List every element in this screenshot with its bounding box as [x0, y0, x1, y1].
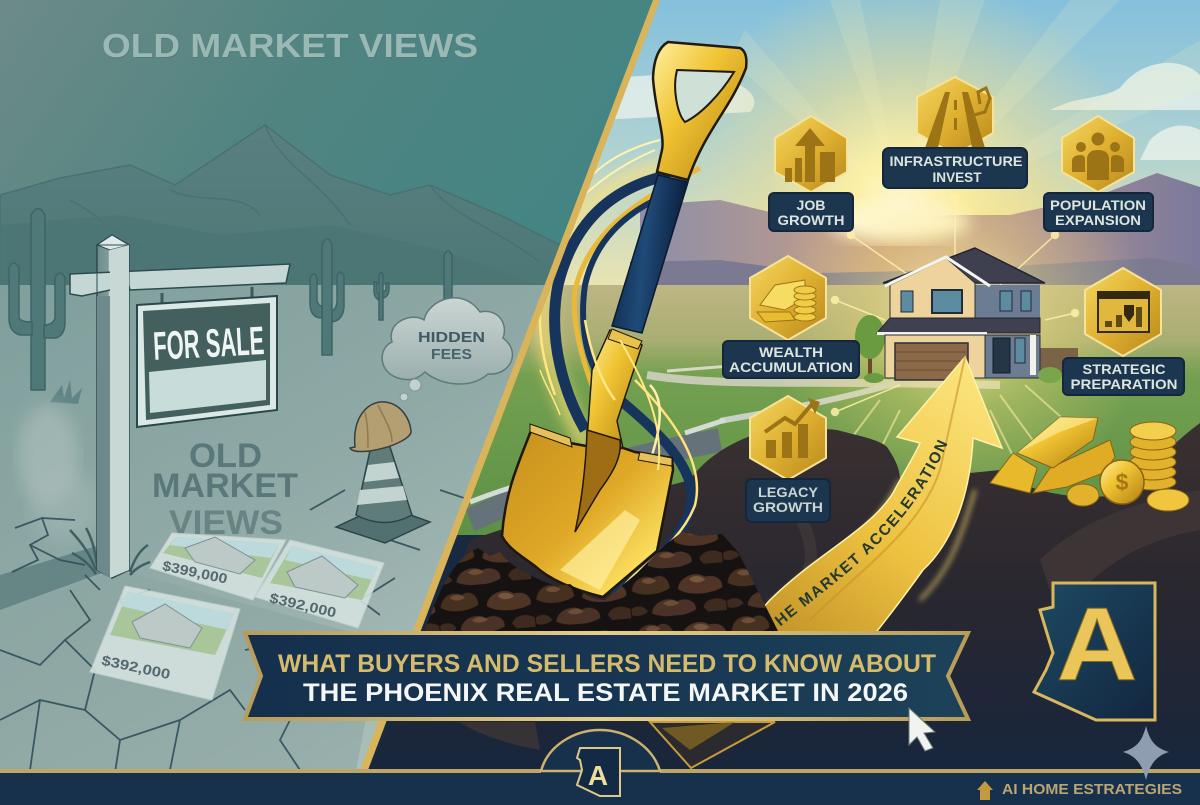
icon: golden shovel — [502, 42, 746, 597]
listing card 2: $392,000 — [268, 590, 338, 620]
listing card 1: $399,000 — [161, 557, 229, 587]
house glow — [800, 184, 1124, 478]
ribbons in front of shovel — [540, 140, 660, 470]
panel: new market right scene — [385, 0, 1200, 769]
soil mounds — [385, 423, 1200, 750]
headline line 1: WHAT BUYERS AND SELLERS NEED TO KNOW ABOUT — [278, 650, 936, 678]
icon: gold bars and coins pile: $ — [1116, 469, 1129, 495]
badge: legacy growth: LEGACY — [758, 484, 819, 500]
icon: mouse cursor — [909, 708, 935, 751]
badge: strategic preparation: STRATEGIC — [1082, 361, 1166, 377]
badge: strategic preparation: PREPARATION — [1070, 376, 1178, 392]
text: old market views on ground — [154, 443, 298, 534]
clouds — [600, 63, 1200, 160]
badge: infrastructure invest: INVEST — [932, 169, 982, 185]
sign board — [137, 296, 277, 427]
arrow: market acceleration — [648, 356, 1027, 769]
banner: headline ribbon — [245, 633, 968, 719]
badge: wealth accumulation — [723, 256, 859, 378]
callout: hidden fees thought cloud: HIDDEN — [418, 329, 485, 346]
desert scrub and dust — [0, 380, 380, 805]
badge: job growth — [769, 116, 853, 231]
sign board: FOR SALE — [152, 319, 265, 369]
badge: wealth accumulation: ACCUMULATION — [729, 359, 853, 375]
icon: gold bars and coins pile — [990, 417, 1189, 511]
ground — [400, 285, 1200, 535]
divider: gold diagonal — [360, 0, 660, 770]
text: old market views on ground: OLD — [189, 437, 262, 475]
text: old market views on ground: MARKET — [152, 467, 298, 505]
listing card 3: $392,000 — [100, 652, 172, 682]
footer small Arizona logo — [577, 748, 620, 796]
heading: old market views: OLD MARKET VIEWS — [102, 27, 478, 64]
ribbons behind shovel — [544, 150, 700, 590]
road — [470, 366, 1000, 520]
grass at base — [70, 528, 150, 575]
badge: job growth: GROWTH — [778, 212, 844, 228]
callout: hidden fees thought cloud: FEES — [431, 346, 472, 363]
badge: infrastructure invest: INFRASTRUCTURE — [890, 153, 1022, 169]
shovel neck and collar — [587, 330, 642, 448]
footer small Arizona logo: A — [588, 760, 608, 791]
headline line 2: THE PHOENIX REAL ESTATE MARKET IN 2026 — [303, 679, 908, 707]
footer bar — [0, 730, 1200, 805]
mountains: far and near ridge — [630, 173, 1200, 290]
hexagon badges — [723, 77, 1184, 522]
arrow: market acceleration: THE MARKET ACCELERATION — [772, 440, 948, 626]
heading: old market views — [104, 34, 478, 58]
badge: legacy growth: GROWTH — [753, 499, 823, 515]
badge: strategic preparation — [1063, 268, 1184, 395]
cactus: saguaro group — [9, 208, 452, 390]
footer brand: AI Home Estrategies: AI HOME ESTRATEGIES — [1002, 781, 1182, 798]
icon: sparkle star watermark — [1123, 726, 1169, 780]
house — [855, 248, 1078, 383]
listing card 1 — [150, 533, 286, 600]
arrow tail below banner — [650, 722, 775, 768]
lightning glow around arrow — [770, 480, 975, 605]
tree — [855, 315, 885, 375]
ground rays — [853, 384, 1062, 454]
shovel handle — [653, 42, 746, 180]
badge: population expansion: EXPANSION — [1055, 212, 1141, 228]
callout: hidden fees thought cloud — [382, 298, 512, 401]
ground cracks — [0, 489, 464, 769]
listing card 2 — [255, 540, 384, 628]
heading: old market views: OLD MARKET VIEWS — [103, 28, 479, 65]
badge: legacy growth — [746, 396, 830, 522]
shovel shaft — [612, 175, 688, 333]
icon: hard hat on traffic cone — [336, 402, 430, 543]
connector lines with dots — [832, 193, 1078, 416]
logo: large Arizona A emblem: A — [1056, 587, 1138, 703]
badge: wealth accumulation: WEALTH — [759, 344, 823, 360]
sun rays — [737, 0, 1200, 134]
sun glow — [694, 0, 1116, 215]
badge: population expansion — [1044, 116, 1153, 231]
shovel blade — [502, 428, 673, 597]
soil pile around shovel — [424, 532, 778, 631]
badge: job growth: JOB — [796, 197, 826, 213]
badge: infrastructure invest — [883, 77, 1027, 188]
listing card 3 — [90, 586, 240, 700]
badge: population expansion: POPULATION — [1050, 197, 1146, 213]
logo: large Arizona A emblem — [1034, 583, 1155, 720]
panel: old market left scene — [0, 0, 660, 805]
mountains: desert range — [0, 125, 560, 295]
sign: for sale post — [70, 235, 290, 578]
text: old market views on ground: VIEWS — [169, 504, 283, 542]
